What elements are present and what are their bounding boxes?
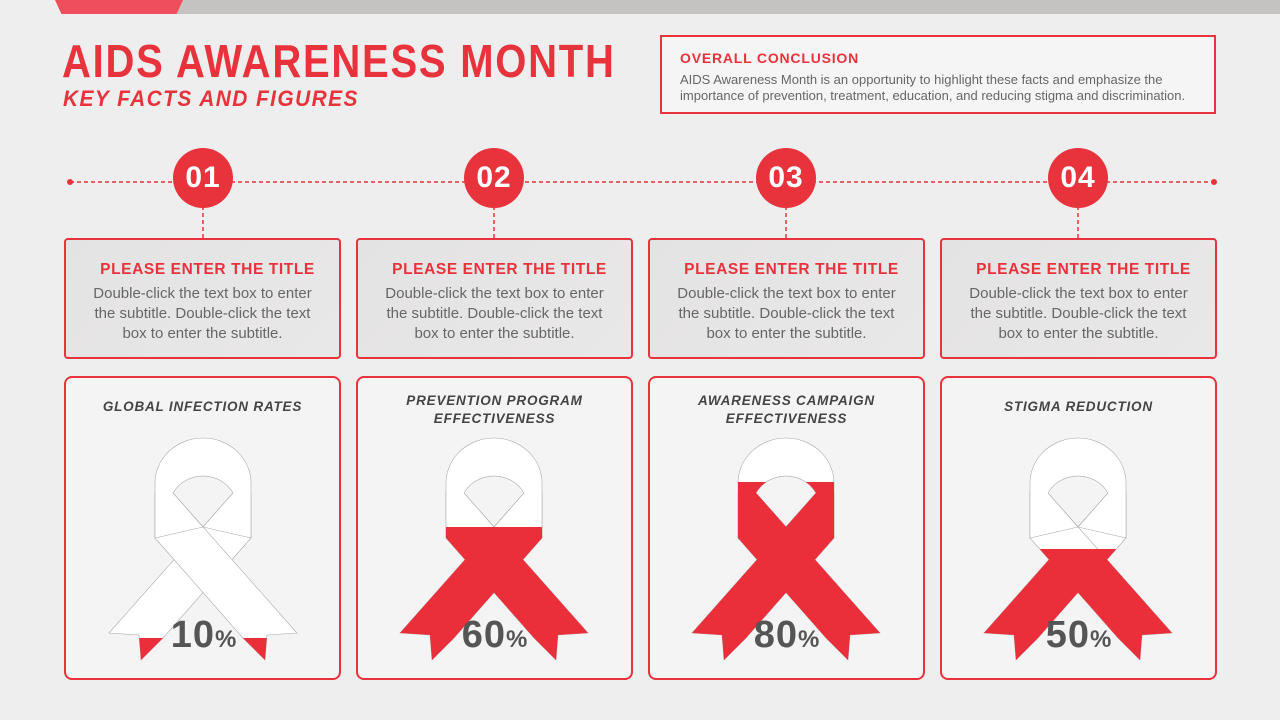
card 4: PLEASE ENTER THE TITLE bbox=[976, 261, 1191, 278]
card 4 bbox=[940, 238, 1217, 359]
card 3: PLEASE ENTER THE TITLE bbox=[684, 261, 899, 278]
percent 80: 80% bbox=[754, 614, 820, 656]
title: AIDS AWARENESS MONTH bbox=[62, 35, 616, 87]
subtitle: KEY FACTS AND FIGURES bbox=[63, 86, 359, 111]
card 2: PLEASE ENTER THE TITLE bbox=[392, 261, 607, 278]
conclusion text: AIDS Awareness Month is an opportunity to highlight these facts and emphasize the importance of prevention, treatment, education, and reducing stigma and discrimination. bbox=[680, 72, 1185, 103]
ribbon 50% bbox=[984, 438, 1172, 660]
card 3: Double-click the text box to enter the subtitle. Double-click the text box to enter the subtitle. bbox=[677, 285, 896, 342]
panel 1 bbox=[64, 376, 341, 680]
card 1: Double-click the text box to enter the subtitle. Double-click the text box to enter the subtitle. bbox=[93, 285, 312, 342]
circle 01 bbox=[173, 148, 233, 208]
percent 50: 50% bbox=[1046, 614, 1112, 656]
panel 3: EFFECTIVENESS bbox=[726, 411, 847, 426]
panel 1: GLOBAL INFECTION RATES bbox=[103, 399, 302, 414]
card 2 bbox=[356, 238, 633, 359]
conclusion heading: OVERALL CONCLUSION bbox=[680, 50, 859, 66]
ribbon 80% bbox=[692, 438, 880, 660]
ribbons bbox=[108, 438, 1172, 660]
panel 2: EFFECTIVENESS bbox=[434, 411, 555, 426]
card 4: Double-click the text box to enter the subtitle. Double-click the text box to enter the subtitle. bbox=[969, 285, 1188, 342]
panel 3 bbox=[648, 376, 925, 680]
panel 2 bbox=[356, 376, 633, 680]
circle 02 bbox=[464, 148, 524, 208]
card 1 bbox=[64, 238, 341, 359]
panel 4 bbox=[940, 376, 1217, 680]
ribbon 10% bbox=[109, 438, 297, 660]
panel 3: AWARENESS CAMPAIGN bbox=[698, 393, 875, 408]
percent 10: 10% bbox=[171, 614, 237, 656]
circle 03: 03 bbox=[768, 161, 804, 194]
circle 04 bbox=[1048, 148, 1108, 208]
circle 03 bbox=[756, 148, 816, 208]
timeline bbox=[67, 179, 1217, 238]
ribbon 60% bbox=[400, 438, 588, 660]
card 3 bbox=[648, 238, 925, 359]
card 1: PLEASE ENTER THE TITLE bbox=[100, 261, 315, 278]
top bar bbox=[55, 0, 1280, 14]
circle 01: 01 bbox=[185, 161, 221, 194]
circle 02: 02 bbox=[476, 161, 512, 194]
circle 04: 04 bbox=[1060, 161, 1096, 194]
panel 4: STIGMA REDUCTION bbox=[1004, 399, 1153, 414]
conclusion box bbox=[660, 35, 1216, 114]
panel 2: PREVENTION PROGRAM bbox=[406, 393, 583, 408]
card 2: Double-click the text box to enter the subtitle. Double-click the text box to enter the subtitle. bbox=[385, 285, 604, 342]
percent 60: 60% bbox=[462, 614, 528, 656]
